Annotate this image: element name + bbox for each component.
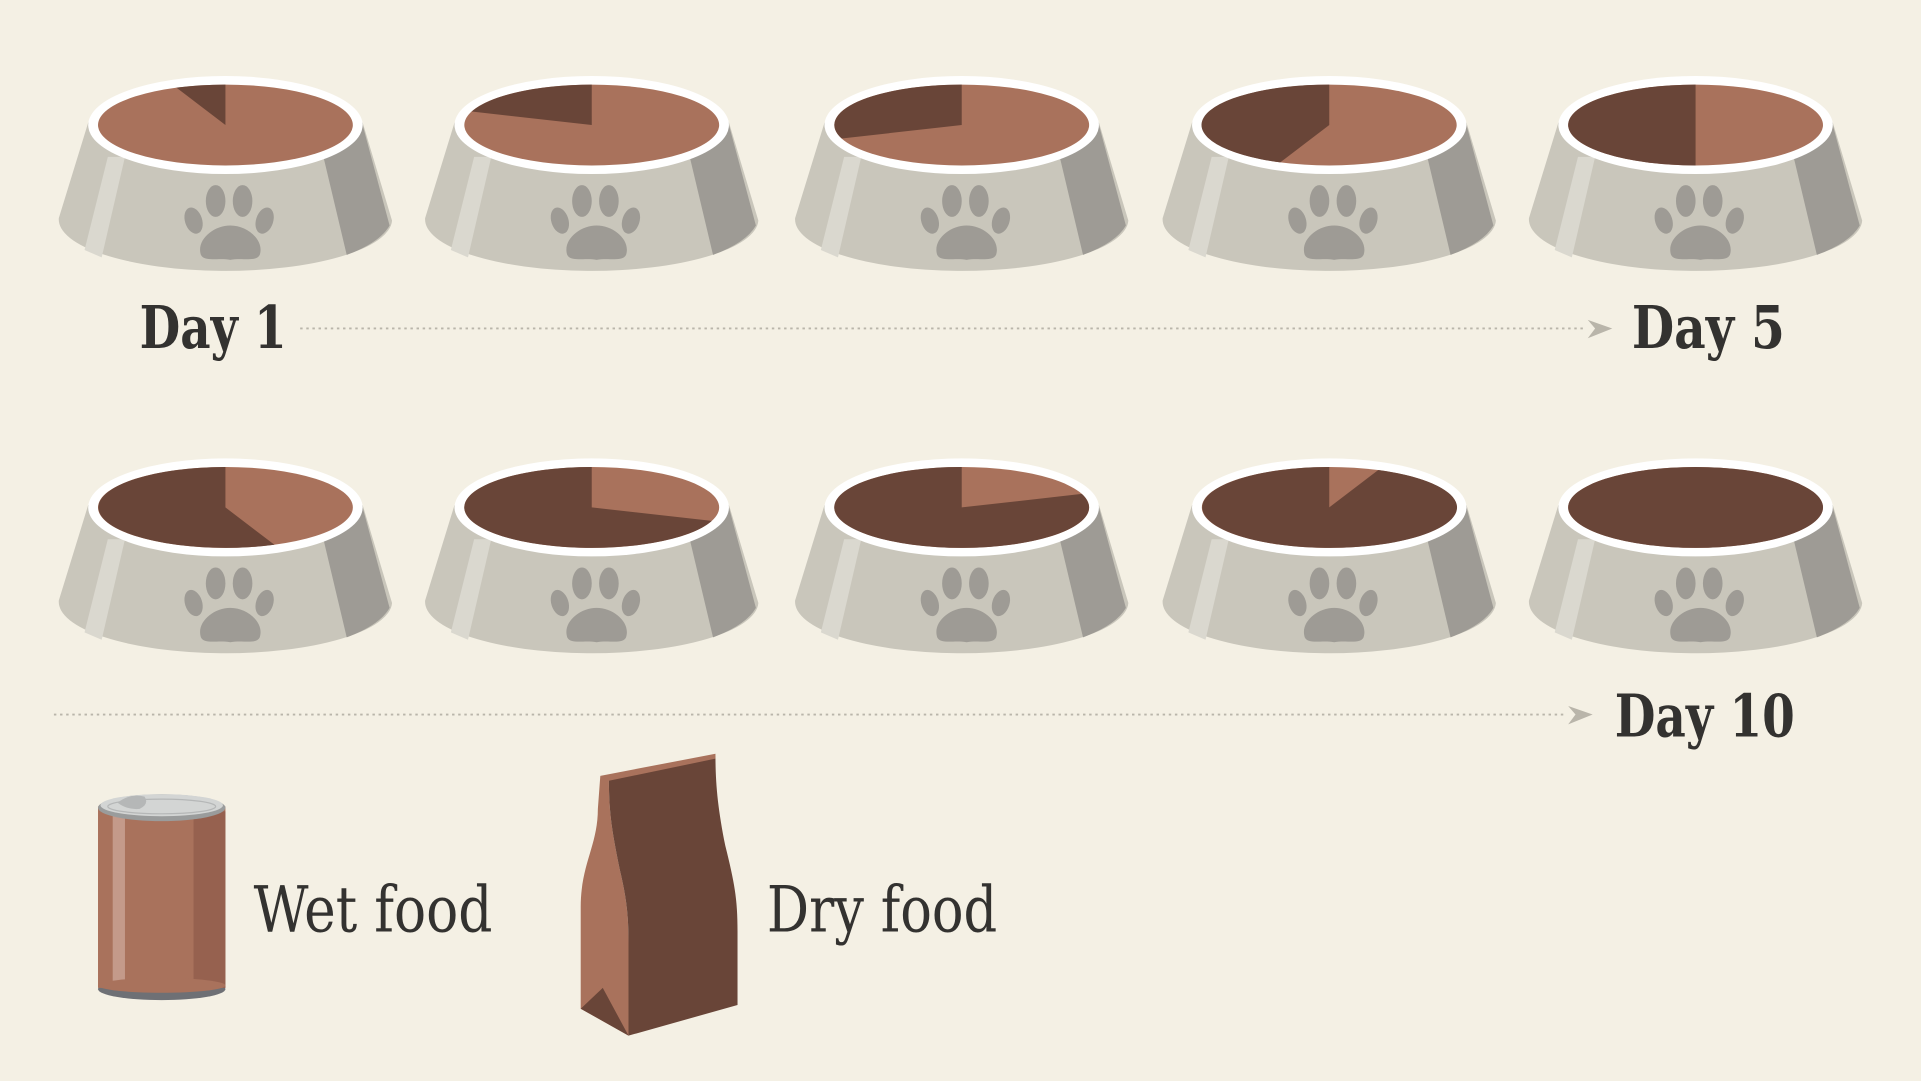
bowl: day 6 xyxy=(59,458,392,653)
arrow: timeline row 2 xyxy=(54,706,1593,724)
label: Day 1: Day 1 xyxy=(140,293,287,362)
bowl: day 5 xyxy=(1529,76,1862,271)
bowl: day 10 xyxy=(1529,458,1862,653)
label: Day 10: Day 10 xyxy=(1615,682,1795,751)
bowl: day 7 xyxy=(425,458,758,653)
icon: wet food can xyxy=(98,794,225,1000)
bowl: day 3 xyxy=(795,76,1128,271)
label: Dry food: Dry food xyxy=(767,873,997,947)
icon: dry food bag xyxy=(581,754,738,1036)
bowl: day 2 xyxy=(425,76,758,271)
arrow: timeline row 1 xyxy=(300,320,1612,338)
bowl: day 1 xyxy=(59,76,392,271)
bowl: day 4 xyxy=(1163,76,1496,271)
bowl: day 8 xyxy=(795,458,1128,653)
label: Wet food: Wet food xyxy=(254,873,493,947)
label: Day 5: Day 5 xyxy=(1632,293,1785,362)
bowl: day 9 xyxy=(1163,458,1496,653)
